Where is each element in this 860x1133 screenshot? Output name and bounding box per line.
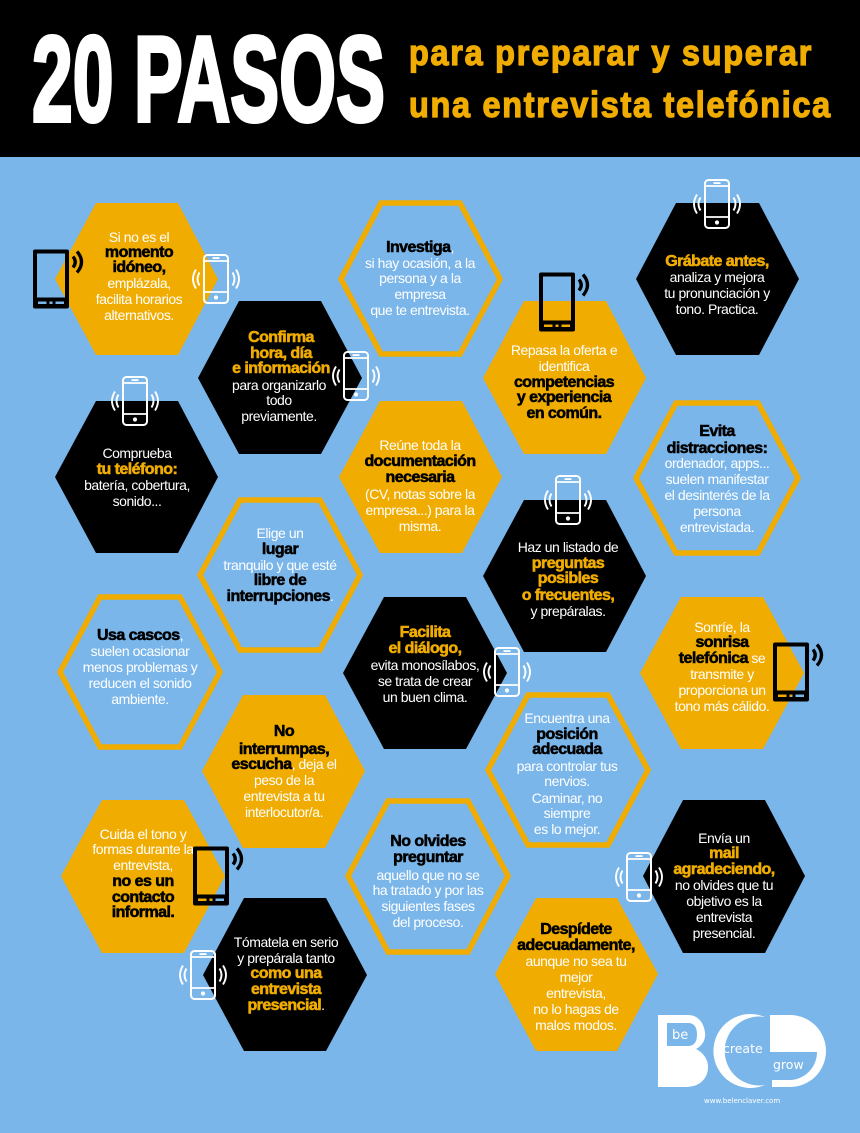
step: posición adecuada: posición: [536, 726, 598, 743]
step: no olvides preguntar: [348, 801, 508, 952]
step: elige lugar: interrupciones.: [227, 588, 333, 605]
step: no interrumpas: peso de la: [254, 772, 315, 788]
step: despídete: Despídete: [540, 921, 612, 938]
step: listado de preguntas: posibles: [538, 570, 599, 587]
step: facilita el diálogo: Facilita: [400, 624, 451, 641]
step: sonríe: tono más cálido.: [675, 698, 769, 714]
step: cuida el tono: formas durante la: [92, 841, 194, 857]
step: posición adecuada: [488, 695, 648, 845]
step: posición adecuada: Encuentra una: [524, 710, 610, 726]
step: evita distracciones: el desinterés de la: [664, 487, 770, 503]
step: usa cascos: Usa cascos,: [97, 627, 183, 644]
step: posición adecuada: Caminar, no: [532, 790, 603, 806]
step: cuida el tono: Cuida el tono y: [100, 826, 187, 842]
step: investiga: Investiga,: [386, 239, 454, 256]
step: no olvides preguntar: siguientes fases: [381, 898, 475, 914]
step: tómatela en serio: y prepárala tanto: [237, 950, 335, 966]
step: envía un mail: no olvides que tu: [675, 877, 773, 893]
step: posición adecuada: para controlar tus: [517, 758, 618, 774]
step: elige lugar: Elige un: [256, 525, 304, 541]
step: sonríe: [640, 597, 804, 749]
icon: phones white: [112, 180, 740, 999]
step: confirma hora: e información: [232, 360, 330, 377]
step: envía un mail: entrevista: [696, 909, 753, 925]
step: cuida el tono: entrevista,: [113, 857, 173, 873]
step: evita distracciones: [636, 403, 798, 553]
step: tómatela en serio: como una: [250, 965, 322, 982]
step: investiga: si hay ocasión, a la: [365, 255, 476, 271]
step: envía un mail: agradeciendo,: [673, 861, 775, 878]
step: reúne: Reúne toda la: [379, 437, 461, 453]
step: evita distracciones: entrevistada.: [680, 519, 754, 535]
step: envía un mail: mail: [709, 845, 739, 862]
step: elige lugar: libre de: [254, 572, 307, 589]
step: despídete: entrevista,: [546, 985, 606, 1001]
step: no interrumpas: No: [274, 723, 295, 740]
step: comprueba: batería, cobertura,: [84, 477, 190, 493]
title: 20 PASOS: 20 PASOS: [32, 11, 385, 147]
step: no olvides preguntar: del proceso.: [393, 914, 463, 930]
step: momento idóneo: facilita horarios: [96, 291, 183, 307]
step: cuida el tono: informal.: [112, 904, 174, 921]
step: no interrumpas: interrumpas,: [239, 741, 329, 758]
step: momento idóneo: idóneo,: [112, 259, 166, 276]
logo: grow: [773, 1057, 804, 1072]
step: no interrumpas: escucha, deja el: [231, 756, 337, 773]
step: elige lugar: [200, 500, 360, 650]
step: no interrumpas: interlocutor/a.: [245, 804, 323, 820]
step: posición adecuada: adecuada: [532, 741, 602, 758]
logo: www.belenclaver.com: [704, 1097, 780, 1105]
step: sonríe: Sonríe, la: [694, 619, 750, 635]
step: grábate: Grábate antes,: [665, 253, 769, 270]
step: sonríe: telefónica se: [679, 650, 765, 667]
step: envía un mail: objetivo es la: [686, 893, 762, 909]
step: posición adecuada: nervios.: [544, 773, 590, 789]
step: tómatela en serio: presencial.: [247, 997, 325, 1014]
step: grábate: [636, 203, 799, 355]
step: sonríe: sonrisa: [695, 634, 749, 651]
step: reúne: empresa...) para la: [366, 502, 475, 518]
step: no interrumpas: entrevista a tu: [243, 788, 325, 804]
step: reúne: [339, 401, 502, 553]
step: envía un mail: presencial.: [693, 925, 755, 941]
step: tómatela en serio: Tómatela en serio: [234, 934, 339, 950]
step: listado de preguntas: o frecuentes,: [522, 587, 614, 604]
step: facilita el diálogo: [343, 597, 507, 749]
step: comprueba: sonido...: [113, 493, 161, 509]
step: listado de preguntas: [483, 500, 646, 652]
step: no olvides preguntar: aquello que no se: [377, 867, 480, 883]
step: usa cascos: reducen el sonido: [89, 675, 192, 691]
step: evita distracciones: distracciones:: [667, 440, 767, 457]
subtitle: para preparar y superar: [409, 33, 811, 73]
step: momento idóneo: [55, 203, 218, 355]
step: confirma hora: hora, día: [250, 345, 313, 362]
step: facilita el diálogo: se trata de crear: [378, 673, 473, 689]
step: momento idóneo: alternativos.: [104, 307, 174, 323]
step: confirma hora: previamente.: [241, 408, 317, 424]
step: despídete: no lo hagas de: [533, 1001, 619, 1017]
step: investiga: empresa: [394, 286, 446, 302]
step: envía un mail: [643, 800, 805, 953]
step: momento idóneo: momento: [105, 244, 174, 261]
step: despídete: adecuadamente,: [517, 937, 635, 954]
step: comprueba: [55, 401, 218, 553]
step: grábate: tono. Practica.: [676, 301, 758, 317]
step: cuida el tono: contacto: [112, 889, 175, 906]
step: envía un mail: Envía un: [698, 830, 750, 846]
step: no olvides preguntar: ha tratado y por las: [373, 882, 484, 898]
step: elige lugar: lugar: [262, 541, 299, 558]
step: usa cascos: suelen ocasionar: [91, 643, 190, 659]
step: facilita el diálogo: evita monosílabos,: [371, 657, 479, 673]
step: reúne: necesaria: [386, 469, 455, 486]
step: repasa: competencias: [514, 374, 615, 391]
step: reúne: misma.: [399, 518, 441, 534]
step: no interrumpas: [202, 695, 365, 848]
step: posición adecuada: siempre: [544, 805, 591, 821]
step: grábate: analiza y mejora: [670, 269, 765, 285]
step: cuida el tono: [61, 800, 225, 953]
step: repasa: Repasa la oferta e: [511, 342, 618, 358]
step: reúne: (CV, notas sobre la: [365, 486, 476, 502]
step: confirma hora: [198, 301, 362, 454]
step: despídete: [495, 898, 658, 1051]
logo: be: [672, 1028, 688, 1043]
step: usa cascos: [60, 597, 220, 747]
step: tómatela en serio: [203, 898, 367, 1051]
step: momento idóneo: Si no es el: [109, 229, 170, 245]
step: evita distracciones: suelen manifestar: [666, 471, 769, 487]
step: posición adecuada: es lo mejor.: [534, 821, 600, 837]
step: despídete: aunque no sea tu: [525, 953, 627, 969]
step: no olvides preguntar: No olvides: [390, 833, 466, 850]
step: facilita el diálogo: el diálogo,: [388, 640, 462, 657]
step: evita distracciones: ordenador, apps...: [665, 455, 769, 471]
step: no olvides preguntar: preguntar: [393, 849, 463, 866]
logo: create: [723, 1041, 763, 1056]
step: despídete: malos modos.: [535, 1017, 617, 1033]
step: confirma hora: todo: [266, 392, 292, 408]
step: usa cascos: ambiente.: [111, 691, 169, 707]
subtitle: una entrevista telefónica: [409, 85, 831, 125]
step: repasa: [483, 301, 646, 454]
step: sonríe: transmite y: [690, 666, 754, 682]
step: tómatela en serio: entrevista: [251, 981, 322, 998]
step: grábate: tu pronunciación y: [664, 285, 770, 301]
step: investiga: [341, 203, 500, 354]
step: comprueba: Comprueba: [102, 445, 172, 461]
step: despídete: mejor: [560, 969, 593, 985]
subtitle: [409, 33, 831, 125]
step: listado de preguntas: y prepáralas.: [530, 603, 606, 619]
header band: [0, 0, 860, 157]
step: sonríe: proporciona un: [678, 682, 766, 698]
step: elige lugar: tranquilo y que esté: [223, 557, 337, 573]
step: usa cascos: menos problemas y: [83, 659, 198, 675]
step: reúne: documentación: [364, 453, 476, 470]
step: momento idóneo: emplázala,: [107, 275, 171, 291]
step: confirma hora: para organizarlo: [232, 377, 327, 393]
icon: phones black: [33, 250, 822, 906]
step: listado de preguntas: Haz un listado de: [518, 539, 619, 555]
step: evita distracciones: persona: [693, 503, 741, 519]
step: cuida el tono: no es un: [112, 873, 174, 890]
step: repasa: en común.: [526, 405, 602, 422]
step: facilita el diálogo: un buen clima.: [383, 689, 467, 705]
step: confirma hora: Confirma: [248, 329, 315, 346]
step: listado de preguntas: preguntas: [532, 555, 605, 572]
logo: [658, 1014, 826, 1105]
step: repasa: y experiencia: [517, 389, 612, 406]
step: evita distracciones: Evita: [699, 423, 735, 440]
step: comprueba: tu teléfono:: [97, 461, 177, 478]
step: investiga: persona y a la: [379, 270, 461, 286]
step: investiga: que te entrevista.: [370, 302, 470, 318]
step: repasa: identifica: [539, 358, 590, 374]
